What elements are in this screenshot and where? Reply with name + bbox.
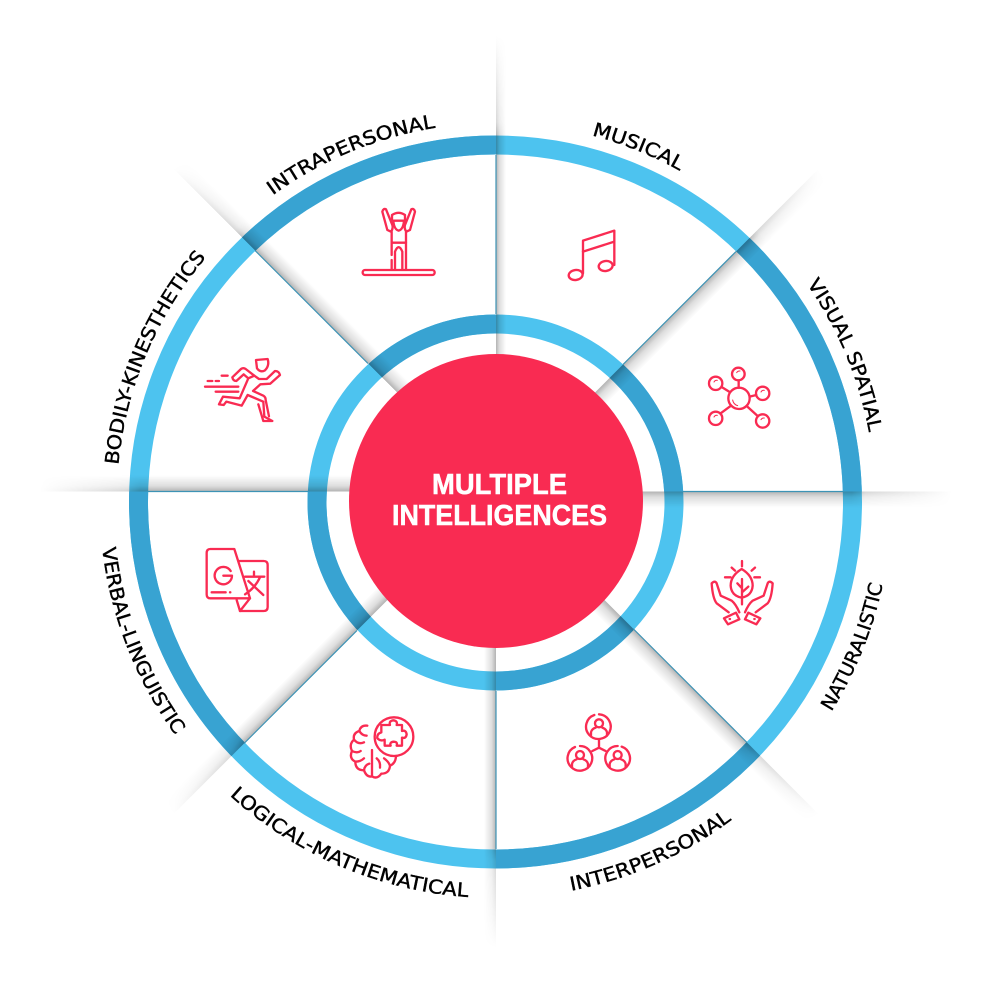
spoke divider lines	[148, 155, 843, 849]
label: intrapersonal: INTRAPERSONAL	[266, 115, 436, 194]
title: MULTIPLE	[432, 469, 567, 501]
icon: hands holding leaf	[712, 561, 773, 624]
icon: molecule network	[709, 368, 769, 428]
icon: person with raised arms on a podium	[363, 209, 435, 275]
label: naturalistic: NATURALISTIC	[820, 582, 882, 710]
outer ring	[138, 145, 852, 859]
icon: running person	[205, 359, 280, 421]
label: logical-mathematical: LOGICAL-MATHEMATICAL	[230, 786, 468, 898]
inner ring	[317, 324, 674, 681]
label: musical: MUSICAL	[594, 122, 681, 171]
label: bodily-kinesthetics: BODILY-KINESTHETICS	[104, 250, 204, 464]
icon: three connected people	[568, 714, 630, 771]
icon: translate pages	[207, 549, 268, 611]
icon: brain with puzzle piece	[351, 717, 413, 778]
title	[392, 469, 607, 532]
central circle	[349, 354, 643, 648]
title: INTELLIGENCES	[392, 500, 607, 532]
label: interpersonal: INTERPERSONAL	[570, 812, 732, 891]
label: visual spatial: VISUAL SPATIAL	[810, 276, 882, 432]
icon: music notes	[568, 231, 614, 281]
label: verbal-linguistic: VERBAL-LINGUISTIC	[102, 546, 186, 734]
